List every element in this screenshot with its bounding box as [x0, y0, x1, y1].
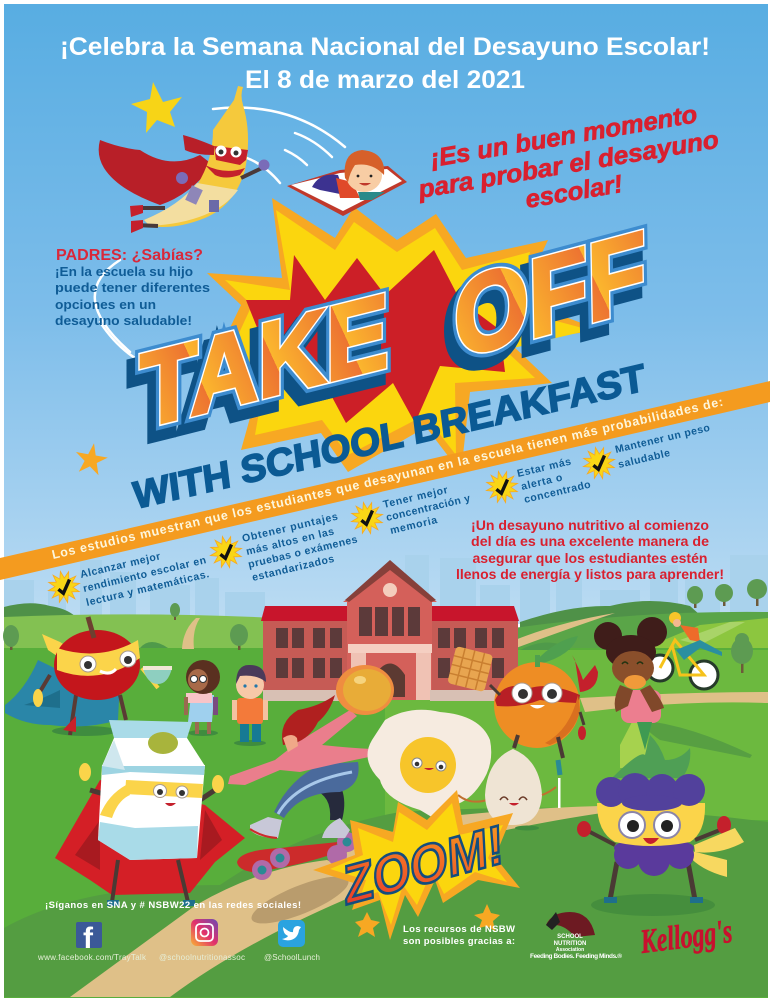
blackberry superhero — [577, 735, 744, 916]
red message: llenos de energía y listos para aprender! — [456, 567, 724, 582]
callout: padres: puede tener diferentes — [55, 281, 210, 295]
social handles: www.facebook.com/TrayTalk — [37, 953, 147, 962]
cyclist — [647, 612, 722, 689]
logo: school nutrition association — [530, 912, 622, 960]
benefit: rendimiento: Alcanzar mejor — [79, 550, 161, 581]
icon: orange star — [76, 443, 108, 475]
girl eating — [594, 617, 667, 768]
trees — [3, 579, 767, 673]
icon: facebook: f — [83, 922, 94, 955]
red message: del día es una excelente manera de — [471, 534, 710, 549]
skateboard — [237, 832, 357, 880]
skater girl — [228, 695, 372, 838]
benefit: alerta — [483, 456, 592, 506]
logo: take off — [133, 208, 647, 461]
waffle — [447, 646, 493, 692]
sponsor credit: Los recursos de NSBW — [403, 924, 515, 935]
sponsor credit — [403, 924, 515, 947]
motion arcs — [95, 108, 345, 358]
social handles: @schoolnutritionassoc — [159, 953, 245, 962]
milk carton superhero — [55, 720, 245, 906]
social heading: ¡Síganos en SNA y # NSBW22 en las redes sociales! — [45, 900, 301, 911]
logo: take off: OFF — [447, 219, 640, 393]
orange superhero — [490, 636, 598, 808]
social handles: @SchoolLunch — [264, 953, 320, 962]
title: ¡Celebra la Semana Nacional del Desayuno Escolar! — [60, 33, 710, 61]
benefit: rendimiento: rendimiento escolar en — [82, 554, 207, 595]
callout: padres: ¡En la escuela su hijo — [55, 265, 193, 279]
benefit: rendimiento: lectura y matemáticas. — [85, 568, 210, 609]
benefit: alerta: alerta o — [520, 472, 564, 493]
benefit: concentracion: concentración y — [385, 492, 472, 524]
banana superhero — [99, 86, 270, 233]
student boy — [232, 665, 268, 746]
tilted red headline — [415, 100, 721, 214]
callout: padres: opciones en un — [55, 298, 156, 312]
benefit: puntajes: Obtener puntajes — [241, 511, 339, 545]
city skyline — [4, 555, 768, 625]
logo: kelloggs: Kellogg's — [638, 913, 734, 961]
social handles — [37, 953, 320, 962]
starburst behind logo — [200, 198, 600, 473]
benefit: peso: Mantener un peso — [614, 422, 711, 456]
logo: take off: TAKE — [140, 271, 388, 450]
boy on flying book — [287, 150, 407, 216]
callout: padres: desayuno saludable! — [55, 314, 192, 328]
benefit: concentracion: memoria — [389, 514, 439, 537]
icon: facebook — [76, 922, 102, 955]
logo: take off: OFF — [453, 208, 647, 382]
logo: school nutrition association: SCHOOL — [557, 934, 583, 940]
sponsor credit: son posibles gracias a: — [403, 936, 515, 947]
logo: school nutrition association: NUTRITION — [554, 941, 586, 947]
callout: padres — [55, 247, 210, 328]
benefit: puntajes: estandarizados — [251, 553, 336, 584]
pancake — [336, 665, 394, 715]
title: El 8 de marzo del 2021 — [245, 66, 525, 94]
benefit: concentracion — [348, 484, 472, 537]
icon: yellow star — [131, 82, 182, 133]
benefit: rendimiento — [45, 550, 210, 609]
fried egg superhero — [368, 710, 491, 822]
hills and grass — [4, 601, 768, 998]
tilted red headline: escolar! — [523, 170, 625, 214]
logo: take off: TAKE — [140, 271, 388, 450]
student girl — [184, 660, 220, 736]
benefit: peso — [580, 422, 711, 482]
tilted red headline: para probar el desayuno — [415, 126, 721, 204]
apple superhero — [5, 617, 172, 736]
benefit: peso: saludable — [617, 447, 671, 471]
orange banner: Los estudios muestran que los estudiantes que desayunan en la escuela tienen más probabilidades de: — [51, 395, 724, 562]
school building — [261, 560, 519, 701]
zoom text: ZOOM! — [342, 813, 505, 917]
logo: take off: TAKE — [133, 282, 382, 461]
benefit: alerta: Estar más — [516, 456, 572, 480]
zoom burst — [313, 790, 520, 940]
red message: asegurar que los estudiantes estén — [472, 551, 708, 566]
logo: school nutrition association: Association — [556, 947, 584, 953]
logo: school nutrition association: Feeding Bodies. Feeding Minds.® — [530, 952, 622, 960]
logo: take off: TAKE — [140, 271, 388, 450]
benefit: puntajes — [207, 511, 359, 584]
sky background — [4, 4, 768, 624]
red message — [456, 518, 724, 582]
icon: instagram — [191, 919, 218, 946]
benefit: concentracion: Tener mejor — [382, 484, 449, 511]
logo: take off: OFF — [453, 208, 647, 382]
logo subtitle: WITH SCHOOL BREAKFAST — [131, 357, 647, 518]
benefit: puntajes: más altos en las — [245, 526, 335, 558]
small stars — [355, 904, 500, 937]
benefit: alerta: concentrado — [523, 479, 592, 506]
icon: twitter — [278, 920, 305, 947]
tilted red headline: ¡Es un buen momento — [428, 100, 699, 173]
logo: take off: OFF — [453, 208, 647, 382]
title — [60, 33, 710, 94]
benefit: puntajes: pruebas o exámenes — [247, 533, 359, 571]
red message: ¡Un desayuno nutritivo al comienzo — [471, 518, 709, 533]
callout: padres: PADRES: ¿Sabías? — [56, 247, 203, 264]
egg superhero — [458, 749, 556, 830]
